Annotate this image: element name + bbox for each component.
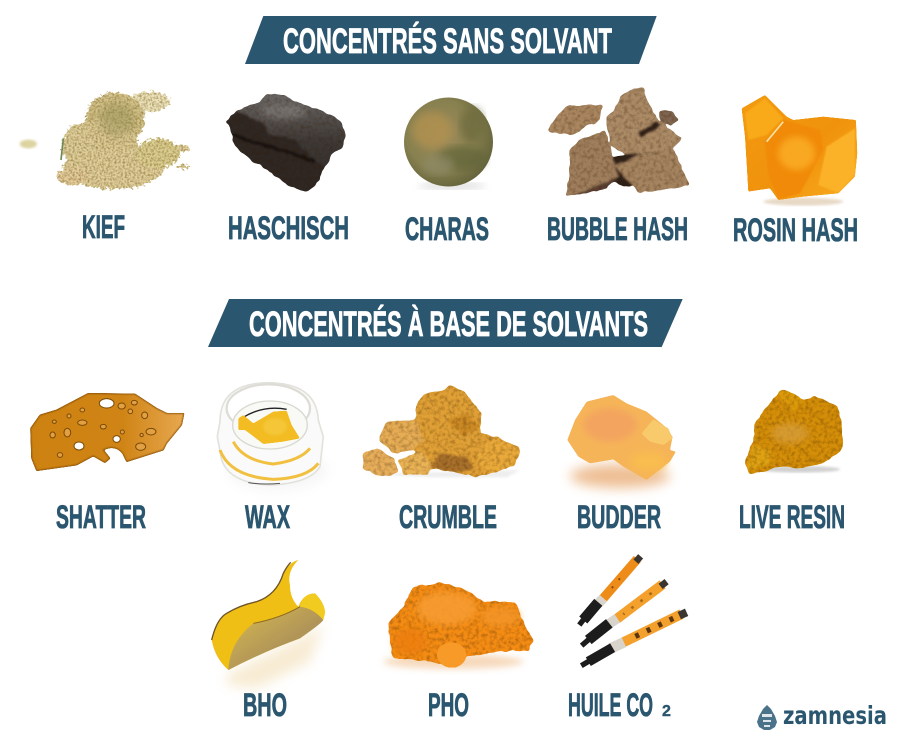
item: budder — [567, 395, 676, 535]
heading banner: concentrés à base de solvants — [208, 299, 683, 347]
item: pho — [383, 582, 533, 723]
label: kief: KIEF — [82, 209, 125, 245]
item: crumble — [363, 385, 520, 535]
item: rosin hash — [733, 95, 858, 248]
label: charas: CHARAS — [405, 211, 489, 247]
label: bho: BHO — [243, 687, 287, 723]
label: huile co2: HUILE CO — [568, 687, 653, 723]
item: kief — [20, 92, 190, 245]
illustration: wax in glass jar — [217, 383, 327, 490]
illustration: oil syringes — [579, 556, 687, 666]
item: live resin — [739, 388, 845, 535]
item: haschisch — [226, 93, 349, 246]
item: bubble hash — [547, 88, 690, 247]
illustration: live resin nugget — [745, 388, 843, 475]
heading banner: concentrés sans solvant: CONCENTRÉS SANS SOLVANT — [283, 21, 612, 61]
label: crumble: CRUMBLE — [399, 499, 497, 535]
illustration: hash block — [226, 93, 347, 192]
item: bho — [212, 560, 325, 723]
item: wax — [217, 383, 327, 535]
illustration: bho ribbon — [212, 560, 325, 688]
illustration: pho mound — [383, 582, 533, 669]
item: huile co2 — [568, 556, 687, 723]
logo: zamnesia — [757, 701, 887, 730]
icon: monkey head — [757, 705, 777, 730]
illustration: charas ball — [404, 98, 493, 189]
heading banner: concentrés sans solvant — [245, 16, 657, 64]
label: wax: WAX — [245, 499, 290, 535]
label: pho: PHO — [428, 687, 469, 723]
syringe: bottom — [581, 612, 687, 666]
illustration: shatter slab — [31, 393, 184, 471]
label: haschisch: HASCHISCH — [228, 210, 349, 246]
label: bubble hash: BUBBLE HASH — [547, 211, 688, 247]
syringe: top — [579, 556, 641, 625]
illustration: rosin crystal — [742, 95, 857, 206]
heading banner: concentrés à base de solvants: CONCENTRÉS À BASE DE SOLVANTS — [249, 304, 648, 344]
subscript 2: 2 — [662, 703, 671, 720]
illustration: kief powder — [20, 92, 190, 189]
illustration: budder lump — [567, 395, 676, 488]
item: charas — [404, 98, 493, 247]
illustration: bubble hash chunks — [547, 88, 690, 197]
item: shatter — [31, 393, 184, 535]
label: budder: BUDDER — [577, 499, 661, 535]
illustration: crumble pile — [363, 385, 520, 477]
label: shatter: SHATTER — [56, 499, 146, 535]
syringe: middle — [582, 582, 667, 646]
